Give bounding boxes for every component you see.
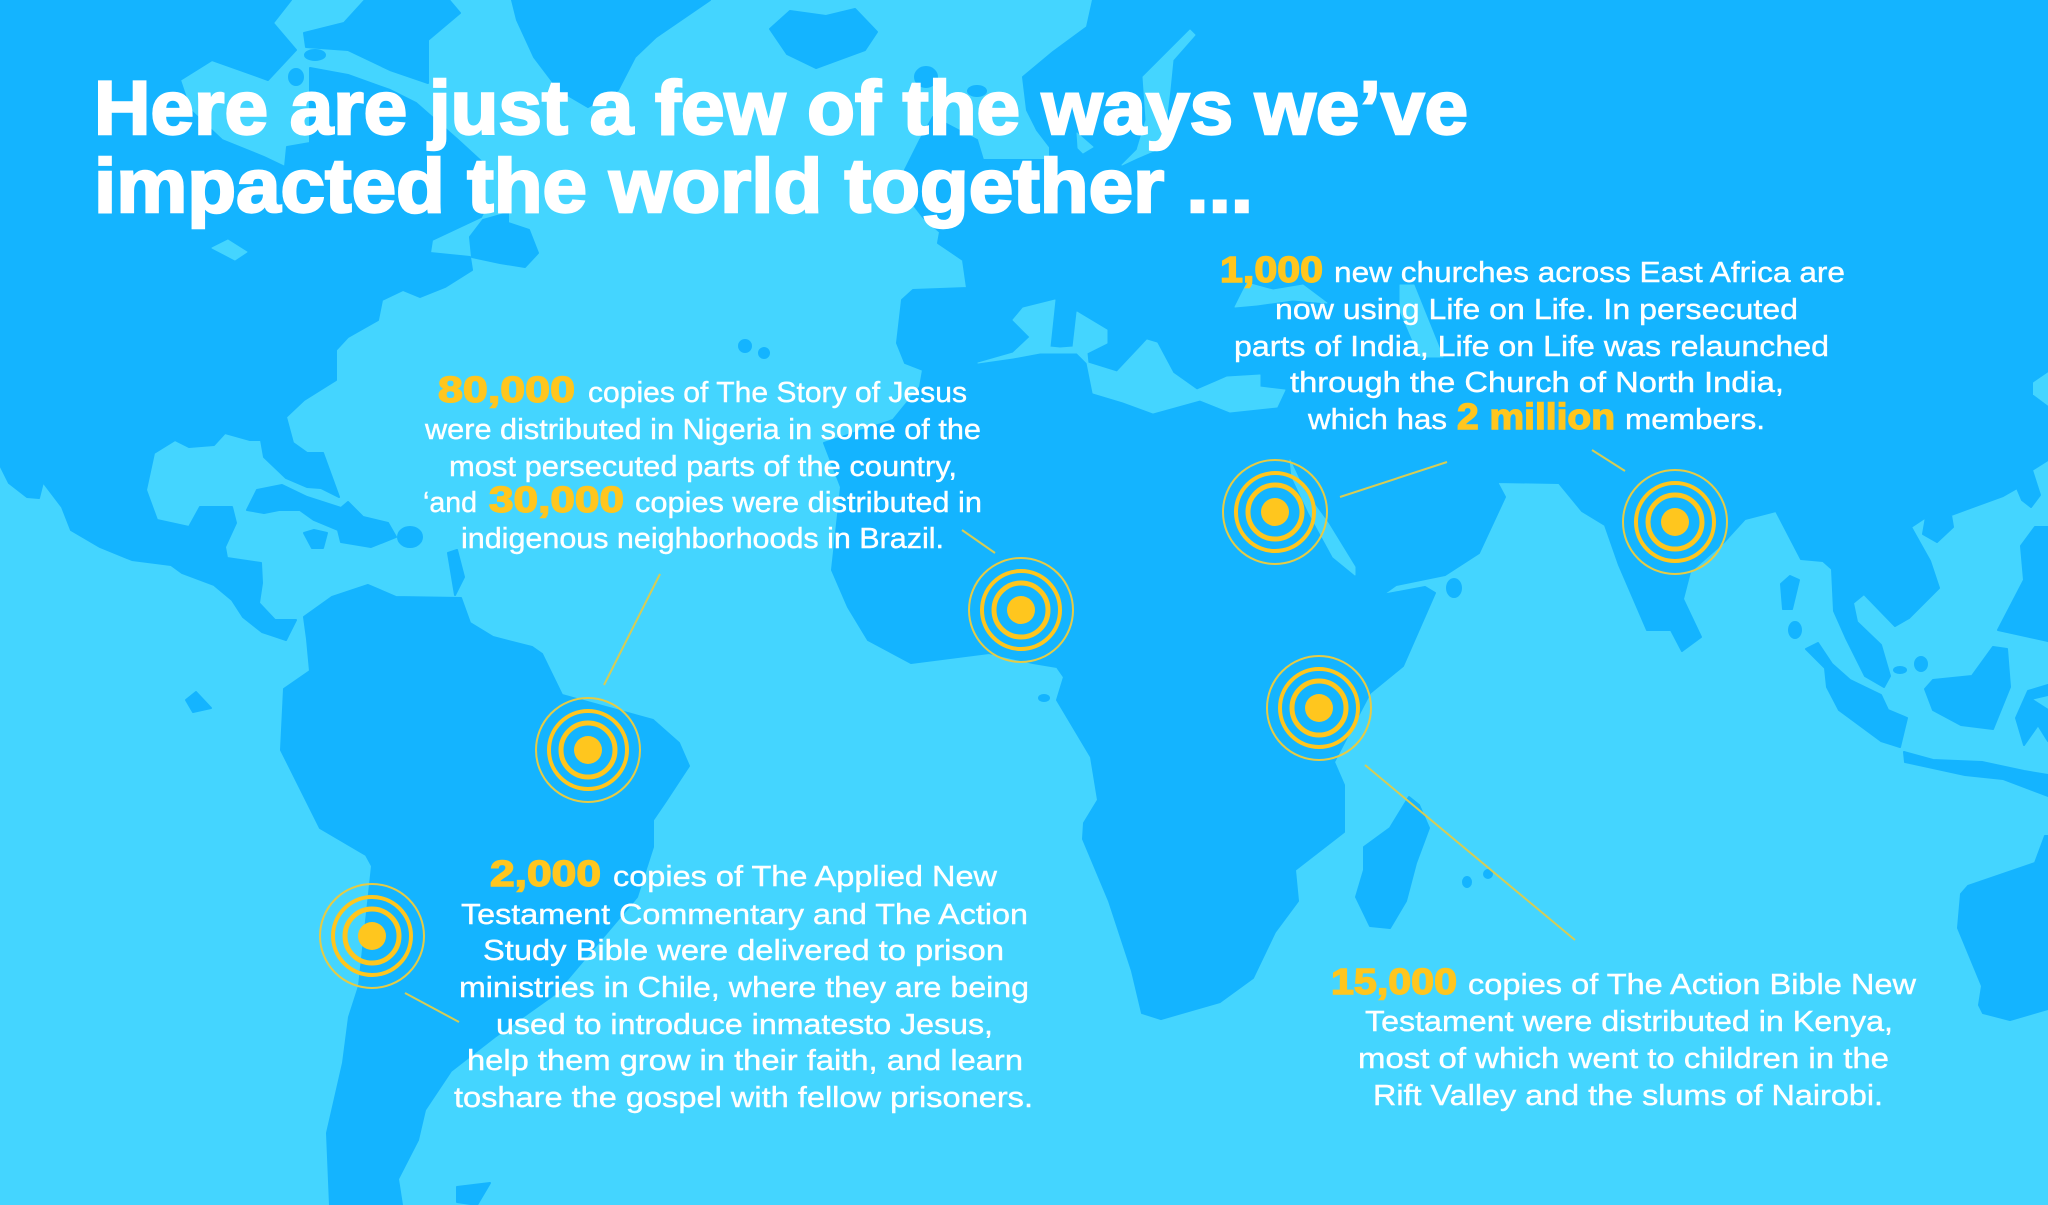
small Indonesian island: [1894, 667, 1906, 673]
Azores: [759, 348, 769, 358]
text block: Chile: ministries in Chile, where they are being: [459, 972, 1029, 1004]
text block: Chile: 2,000: [490, 853, 601, 894]
Sumatra: [1806, 643, 1907, 747]
leader lines: [405, 450, 1625, 1022]
Iceland: [770, 9, 877, 68]
text block: Kenya: 15,000: [1331, 961, 1457, 1002]
Mascarene island: [1484, 870, 1492, 878]
Newfoundland: [470, 213, 538, 267]
Jamaica: [304, 530, 327, 548]
text block: Chile: Testament Commentary and The Action: [461, 899, 1028, 931]
text block: East Africa and India: 1,000: [1220, 249, 1323, 290]
Gulf of Guinea island: [1039, 695, 1049, 701]
text block: Kenya: Testament were distributed in Kenya,: [1365, 1006, 1893, 1038]
Java and Lesser Sunda: [1904, 752, 2048, 796]
marker: Nigeria: [969, 558, 1073, 662]
title: impacted the world together ...: [94, 144, 1253, 229]
text block: Kenya: most of which went to children in the: [1358, 1043, 1889, 1075]
small Arctic island: [305, 50, 325, 60]
Galapagos: [186, 692, 211, 712]
text block: Kenya: Rift Valley and the slums of Nairobi.: [1373, 1080, 1883, 1112]
text block: Kenya: [1331, 961, 1916, 1112]
marker: Brazil: [536, 698, 640, 802]
North America: [0, 0, 483, 640]
text block: Chile: used to introduce inmatesto Jesus,: [496, 1009, 993, 1041]
text block: East Africa and India: [1220, 249, 1845, 437]
Borneo: [1925, 647, 2010, 729]
text block: East Africa and India: new churches across East Africa are: [1334, 257, 1845, 289]
Australia: [1958, 836, 2048, 1020]
Shetland Islands: [968, 86, 986, 96]
Faroe Islands: [915, 67, 937, 87]
text block: Chile: toshare the gospel with fellow prisoners.: [454, 1082, 1033, 1114]
Sulawesi: [2016, 685, 2048, 745]
South America: [281, 585, 689, 1205]
Puerto Rico: [398, 527, 422, 547]
text block: Chile: [454, 853, 1033, 1114]
text block: East Africa and India: 2 million: [1457, 396, 1615, 437]
text block: East Africa and India: through the Church of North India,: [1290, 367, 1784, 399]
marker: East Africa: [1223, 460, 1327, 564]
Mascarene island: [1463, 877, 1471, 887]
Socotra: [1447, 579, 1461, 597]
Azores: [739, 340, 751, 352]
text block: Nigeria and Brazil: ‘and: [423, 487, 477, 519]
title: Here are just a few of the ways we’ve: [94, 66, 1468, 151]
text block: East Africa and India: now using Life on Life. In persecuted: [1275, 294, 1798, 326]
inland lake: [212, 240, 247, 260]
text block: Chile: Study Bible were delivered to prison: [483, 935, 1004, 967]
text block: Chile: help them grow in their faith, and learn: [467, 1045, 1023, 1077]
Greenland: [512, 0, 710, 107]
text block: Nigeria and Brazil: most persecuted parts of the country,: [449, 451, 957, 483]
Kattegat strait: [1077, 133, 1093, 153]
text block: Nigeria and Brazil: 80,000: [438, 369, 575, 410]
text block: Nigeria and Brazil: copies were distributed in: [635, 487, 982, 519]
text block: Nigeria and Brazil: copies of The Story of Jesus: [588, 377, 967, 409]
Baltic Sea: [1122, 30, 1195, 165]
Caspian Sea: [1400, 285, 1443, 357]
Cuba and Hispaniola: [247, 485, 396, 547]
marker: India: [1623, 470, 1727, 574]
text block: East Africa and India: which has: [1307, 404, 1447, 436]
Lesser Antilles: [448, 550, 464, 595]
text block: Nigeria and Brazil: [423, 369, 982, 555]
Madagascar: [1356, 797, 1429, 928]
text block: East Africa and India: members.: [1625, 404, 1765, 436]
small Indonesian island: [1915, 657, 1927, 671]
text block: Nigeria and Brazil: were distributed in Nigeria in some of the: [424, 414, 981, 446]
Eurasia and Africa: [824, 0, 2048, 1019]
Black Sea: [1235, 283, 1327, 307]
title: [94, 66, 1468, 229]
text block: Nigeria and Brazil: 30,000: [489, 479, 624, 520]
text block: Kenya: copies of The Action Bible New: [1468, 969, 1916, 1001]
marker: Kenya: [1267, 656, 1371, 760]
Andaman island: [1789, 622, 1801, 638]
text block: Nigeria and Brazil: indigenous neighborhoods in Brazil.: [461, 523, 944, 555]
Red Sea: [1290, 460, 1355, 575]
text block: East Africa and India: parts of India, Life on Life was relaunched: [1234, 331, 1829, 363]
Mediterranean Sea: [978, 300, 1285, 413]
marker: Chile: [320, 884, 424, 988]
Sri Lanka-like island: [1781, 576, 1799, 609]
Arctic islands: [304, 0, 460, 83]
Falkland Islands: [457, 1183, 490, 1205]
text block: Chile: copies of The Applied New: [613, 861, 997, 893]
small Arctic island: [289, 69, 303, 85]
Philippines: [1998, 527, 2048, 641]
